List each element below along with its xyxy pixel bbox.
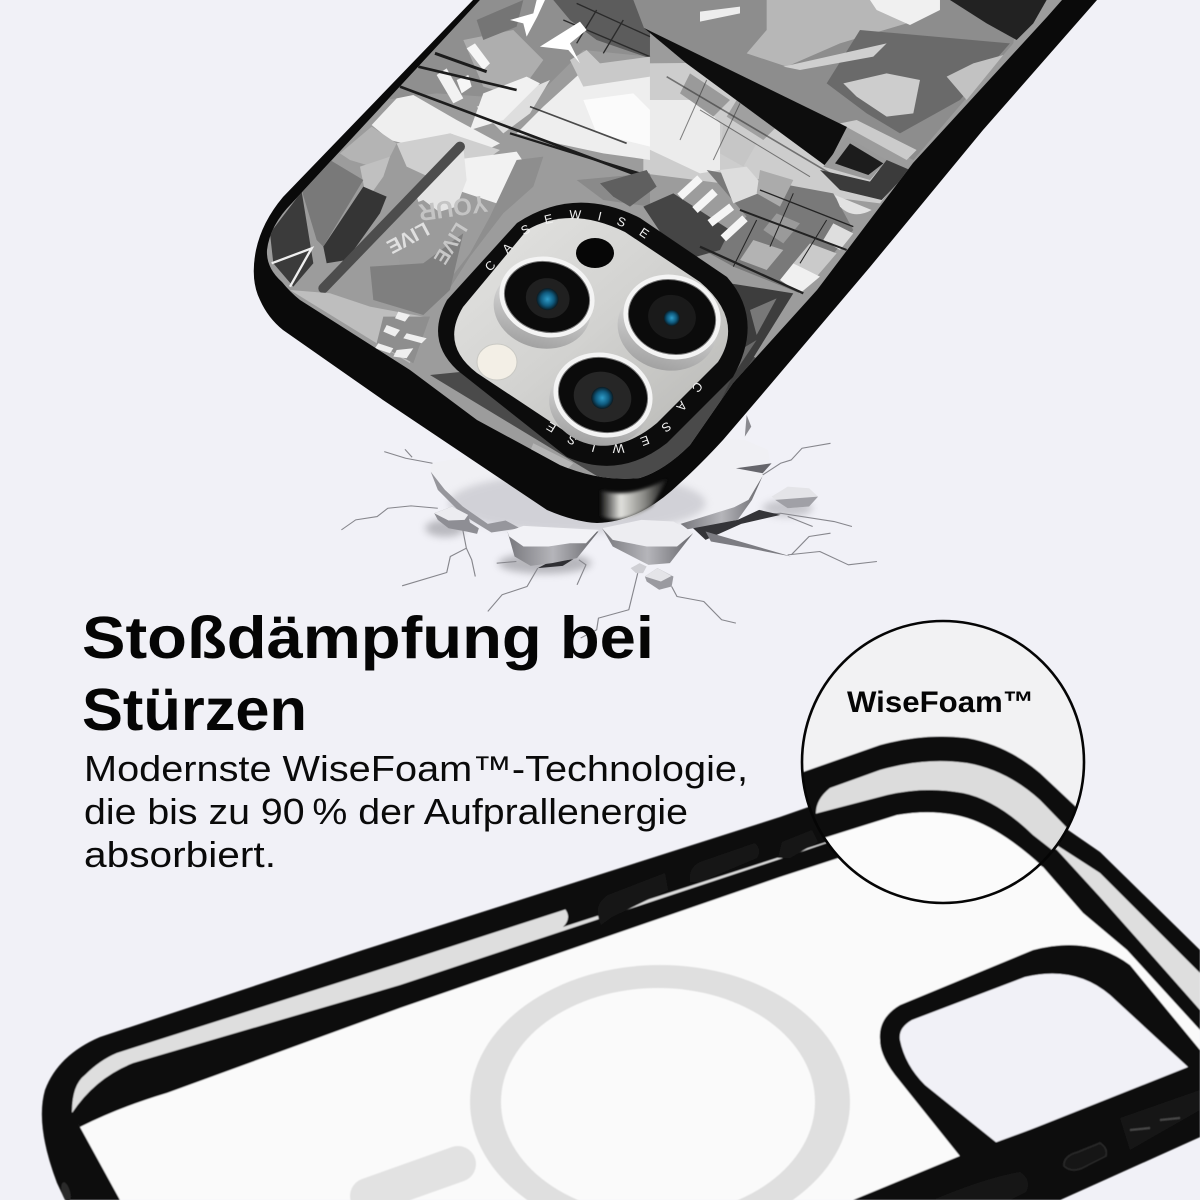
mirrored sign lettering in artwork: YOUR [417, 189, 489, 226]
case corner highlight [600, 478, 668, 519]
lens bottom [540, 342, 662, 457]
lower bumper details [933, 1090, 1200, 1200]
body text: die bis zu 90 % der Aufprallenergie [84, 791, 688, 832]
magnifier outline [802, 621, 1084, 903]
merged bumper by the buttons [563, 815, 845, 927]
camera island bumper [438, 203, 748, 466]
magnifier callout [800, 620, 1086, 904]
bottom transparent case frame [42, 770, 1200, 1200]
printed city artwork [250, 0, 1110, 490]
body text: absorbiert. [84, 834, 276, 875]
left artwork layer [270, 0, 650, 363]
flash [477, 344, 517, 380]
WiseFoam label: WiseFoam™ [847, 686, 1034, 719]
lower upper-right artwork layer [643, 63, 907, 203]
lidar dot [576, 238, 614, 268]
silver camera plate [454, 218, 728, 445]
camera cut-out [900, 974, 1188, 1143]
magnetic charging ring [470, 965, 850, 1200]
magnifier contents [804, 736, 1076, 864]
camera cut-out rim [880, 945, 1200, 1160]
left wall port [60, 1181, 72, 1200]
body text [84, 748, 748, 875]
second black rim [72, 808, 1200, 1200]
light inner slot [72, 795, 1200, 1200]
upper right artwork layer [633, 0, 1047, 200]
bumper lettering bottom: CASEWISE [546, 383, 702, 453]
lens right [608, 264, 730, 381]
lower bumper [853, 1067, 1200, 1200]
heading [82, 605, 654, 743]
lens left [485, 246, 603, 359]
body text: Modernste WiseFoam™-Technologie, [84, 748, 748, 789]
mirrored sign lettering in artwork [386, 196, 488, 265]
right artwork layer [530, 167, 872, 470]
cracked surface under the phone [341, 415, 877, 638]
heading: Stoßdämpfung bei [82, 605, 654, 671]
outer black bumper [42, 770, 1200, 1200]
top phone in printed case [254, 0, 1097, 523]
phone case body [254, 0, 1097, 523]
bumper lettering top: CASEWISE [486, 210, 650, 270]
charging tab [368, 1164, 458, 1196]
clear back panel [80, 830, 1200, 1200]
mirrored sign lettering in artwork: LIVE [429, 219, 471, 268]
sliver of print below the camera [430, 357, 756, 478]
side buttons [598, 830, 818, 925]
mirrored sign lettering in artwork: LIVE [383, 217, 433, 257]
heading: Stürzen [82, 677, 307, 743]
